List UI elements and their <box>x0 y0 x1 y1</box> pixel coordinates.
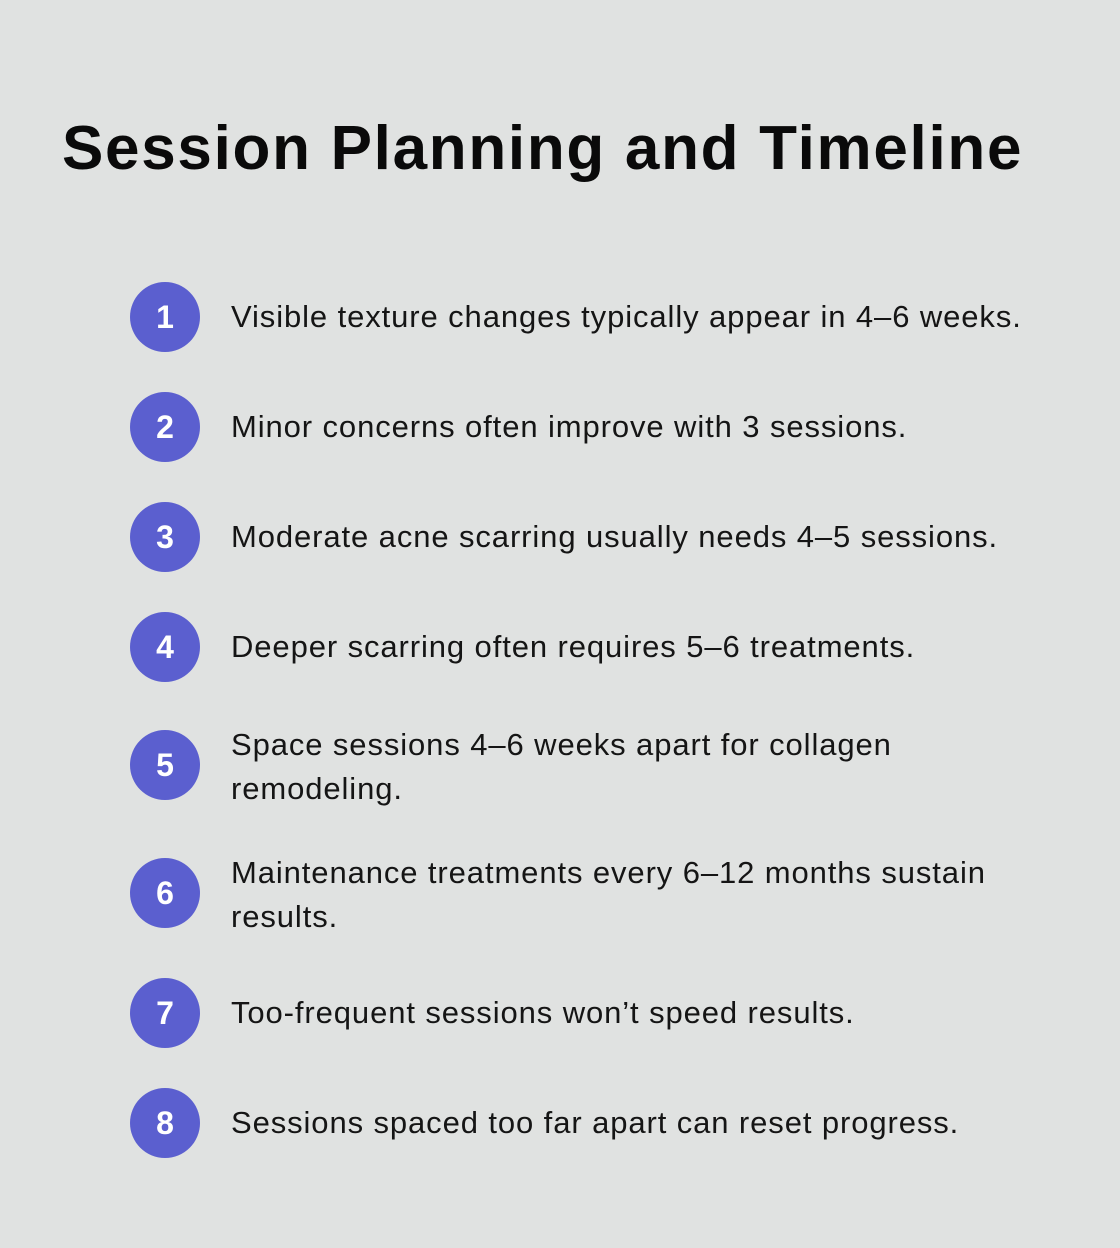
text 7: Too-frequent sessions won’t speed results. <box>231 995 855 1030</box>
badge 7 <box>130 978 200 1048</box>
text 5 <box>231 727 892 806</box>
badge 1 <box>130 282 200 352</box>
badge 6: 6 <box>156 875 174 911</box>
badge 7: 7 <box>156 995 174 1031</box>
text 4: Deeper scarring often requires 5–6 treatments. <box>231 629 915 664</box>
badge 4 <box>130 612 200 682</box>
badge 2 <box>130 392 200 462</box>
item 2 <box>130 392 907 462</box>
badge 8 <box>130 1088 200 1158</box>
text 6: results. <box>231 899 338 934</box>
text 6: Maintenance treatments every 6–12 months sustain <box>231 855 986 890</box>
text 5: remodeling. <box>231 771 403 806</box>
text 3: Moderate acne scarring usually needs 4–5 sessions. <box>231 519 998 554</box>
item 3 <box>130 502 998 572</box>
badge 6 <box>130 858 200 928</box>
item 1 <box>130 282 1022 352</box>
text 5: Space sessions 4–6 weeks apart for collagen <box>231 727 892 762</box>
item 5 <box>130 727 892 806</box>
text 2: Minor concerns often improve with 3 sessions. <box>231 409 907 444</box>
text 8: Sessions spaced too far apart can reset progress. <box>231 1105 959 1140</box>
item 7 <box>130 978 855 1048</box>
text 6 <box>231 855 986 934</box>
badge 4: 4 <box>156 629 174 665</box>
badge 2: 2 <box>156 409 174 445</box>
badge 8: 8 <box>156 1105 174 1141</box>
badge 5: 5 <box>156 747 174 783</box>
text 1: Visible texture changes typically appear in 4–6 weeks. <box>231 299 1022 334</box>
badge 3: 3 <box>156 519 174 555</box>
badge 1: 1 <box>156 299 174 335</box>
item 4 <box>130 612 915 682</box>
item 8 <box>130 1088 959 1158</box>
badge 3 <box>130 502 200 572</box>
title: Session Planning and Timeline <box>62 114 1023 183</box>
item 6 <box>130 855 986 934</box>
badge 5 <box>130 730 200 800</box>
